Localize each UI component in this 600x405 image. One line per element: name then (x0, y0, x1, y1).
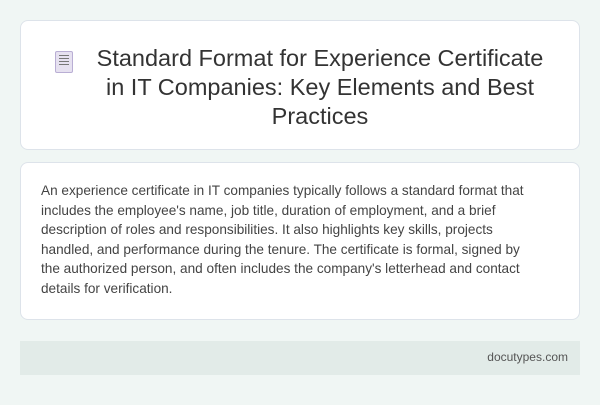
description text: handled, and performance during the tenure. The certificate is formal, signed by (41, 242, 520, 256)
title heading: in IT Companies: Key Elements and Best (106, 74, 534, 100)
title heading (97, 45, 543, 129)
title heading: Practices (272, 103, 368, 129)
description text: An experience certificate in IT companies typically follows a standard format that (41, 183, 524, 198)
title panel (20, 20, 580, 150)
title heading: Standard Format for Experience Certificate (97, 45, 543, 71)
footer (20, 341, 580, 375)
description text: includes the employee's name, job title, duration of employment, and a brief (41, 202, 495, 218)
icon: document (55, 51, 73, 73)
description text: the authorized person, and often includes the company's letterhead and contact (41, 261, 520, 276)
description text: description of roles and responsibilities. It also highlights key skills, projects (41, 222, 493, 237)
footer: docutypes.com (487, 350, 568, 364)
description text: details for verification. (41, 280, 172, 296)
description text (41, 183, 524, 296)
description panel (20, 162, 580, 320)
